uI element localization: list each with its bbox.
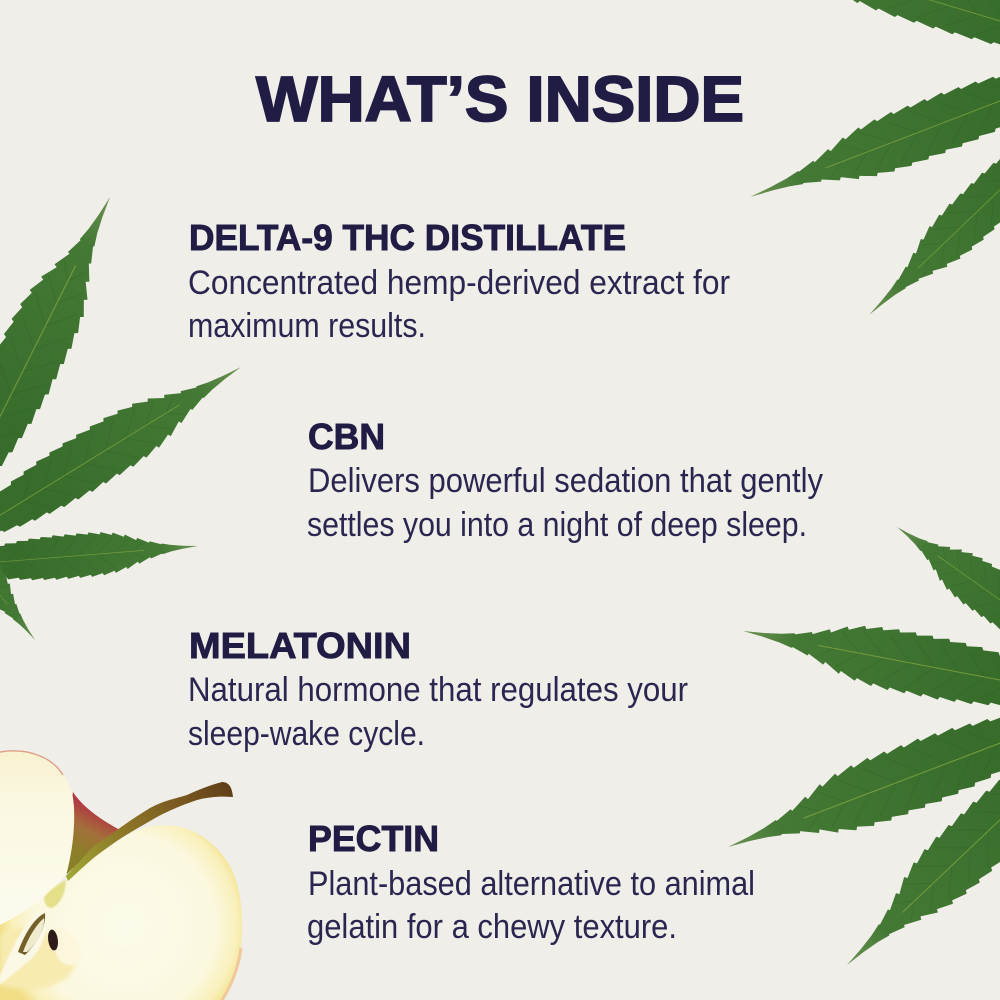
description: Plant-based alternative to animal [308, 865, 755, 903]
apple back skin [62, 792, 120, 874]
apple illustration [0, 751, 242, 1000]
description: gelatin for a chewy texture. [307, 908, 677, 946]
heading: MELATONIN [189, 625, 411, 666]
heading: CBN [308, 416, 385, 457]
core walls [0, 913, 46, 985]
apple right half [0, 826, 242, 1000]
apple stem [66, 782, 233, 881]
ingredient: delta-9 THC distillate [188, 217, 730, 345]
seed [47, 929, 59, 951]
left lobe rim [0, 751, 63, 775]
leaflet: top edge [722, 0, 1000, 86]
calyx green [44, 880, 66, 908]
leaflet: third [0, 524, 200, 588]
ingredient: melatonin [188, 625, 688, 753]
core wall right [52, 928, 81, 965]
description: sleep-wake cycle. [188, 715, 425, 753]
apple left lobe [0, 751, 74, 925]
description: settles you into a night of deep sleep. [307, 506, 807, 544]
title: WHAT’S INSIDE [256, 63, 744, 135]
ingredient: pectin [307, 818, 755, 946]
leaflet: upper [0, 182, 140, 531]
description: Natural hormone that regulates your [188, 671, 688, 709]
heading: DELTA-9 THC DISTILLATE [189, 217, 626, 258]
leaflet: third [716, 681, 1000, 878]
seed pocket [18, 913, 45, 955]
description: maximum results. [188, 307, 426, 345]
leaflet: top [883, 507, 1000, 681]
apple core [0, 928, 74, 989]
description: Concentrated hemp-derived extract for [188, 264, 730, 302]
description: Delivers powerful sedation that gently [308, 462, 823, 500]
leaflet: bottom [825, 696, 1000, 988]
leaflet: lower [852, 79, 1000, 333]
leaf cluster: lower right [716, 507, 1000, 988]
ingredient: CBN [307, 416, 823, 544]
description [188, 671, 688, 753]
description [307, 865, 755, 946]
leaflet: middle [740, 35, 1000, 224]
heading: PECTIN [308, 818, 439, 859]
leaf cluster: top right [722, 0, 1000, 333]
leaflet: second [0, 343, 256, 567]
seed pocket inner [23, 918, 44, 952]
leaf cluster: left [0, 182, 256, 652]
apple skin rim [222, 948, 241, 1000]
leaflet: bottom [0, 462, 50, 652]
leaflet: second [737, 601, 1000, 728]
description [307, 462, 823, 544]
description [188, 264, 730, 345]
